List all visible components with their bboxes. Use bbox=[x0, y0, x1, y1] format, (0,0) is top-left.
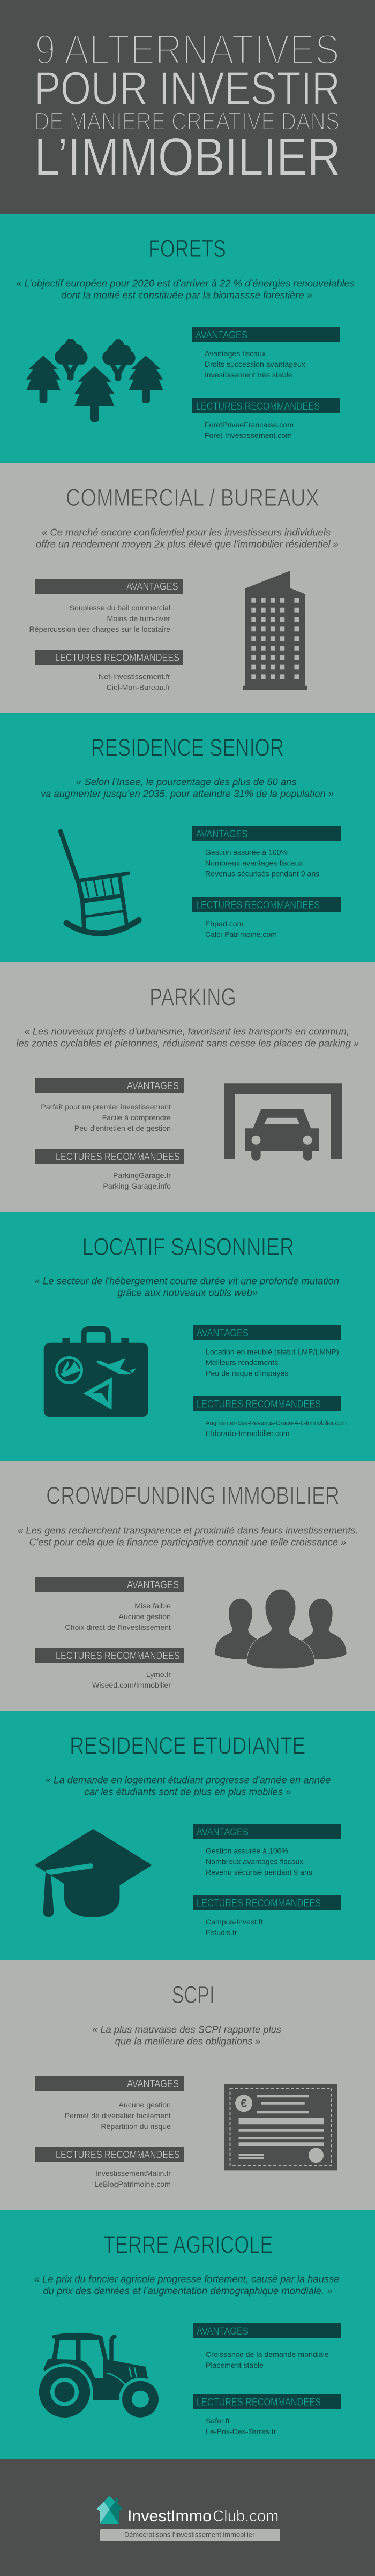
avantages bar bbox=[193, 1325, 341, 1340]
lectures list bbox=[94, 2169, 171, 2188]
avantages list: Croissance de la demande mondiale bbox=[206, 2350, 329, 2359]
avantages list: Peu de risque d'impayés bbox=[206, 1369, 288, 1377]
lectures list: Calci-Patrimoine.com bbox=[205, 930, 277, 939]
avantages bar bbox=[192, 327, 340, 342]
icon: rocking chair bbox=[61, 832, 139, 933]
panel: scpi bbox=[0, 1960, 375, 2210]
lectures list: Ehpad.com bbox=[205, 919, 243, 928]
title: 9 ALTERNATIVES bbox=[35, 26, 340, 73]
lectures list bbox=[206, 2416, 276, 2436]
lectures list: Estudis.fr bbox=[206, 1928, 237, 1937]
quote: forets: dont la moitié est constituée par la biomassse forestière » bbox=[61, 290, 312, 300]
panel: terre agricole bbox=[0, 2210, 375, 2459]
title bbox=[34, 26, 341, 186]
quote: scpi: que la meilleure des obligations » bbox=[115, 2036, 261, 2047]
quote: parking: les zones cyclables et pietonnes, réduisent sans cesse les places de parking » bbox=[16, 1038, 359, 1049]
avantages list: Nombreux avantages fiscaux bbox=[206, 1857, 303, 1865]
avantages list bbox=[206, 1846, 312, 1876]
quote: scpi: « La plus mauvaise des SCPI rapporte plus bbox=[92, 2024, 281, 2035]
lectures bar bbox=[35, 1149, 184, 1164]
title: L’IMMOBILIER bbox=[34, 127, 341, 186]
quote: scpi bbox=[92, 2024, 281, 2047]
avantages list: Gestion assurée à 100% bbox=[206, 1846, 288, 1855]
quote: residence etudiante bbox=[46, 1775, 331, 1797]
avantages list: Gestion assurée à 100% bbox=[205, 848, 288, 857]
lectures bar bbox=[35, 2147, 184, 2162]
panel: header bbox=[0, 0, 375, 214]
lectures list bbox=[206, 1917, 264, 1937]
heading: residence senior: RESIDENCE SENIOR bbox=[91, 734, 284, 761]
lectures bar bbox=[35, 650, 183, 665]
avantages list bbox=[206, 1347, 339, 1377]
lectures list bbox=[206, 1421, 347, 1438]
heading: scpi: SCPI bbox=[171, 1981, 214, 2008]
quote: residence etudiante: car les étudiants sont de plus en plus mobiles » bbox=[85, 1787, 291, 1797]
lectures list: Lymo.fr bbox=[146, 1670, 171, 1679]
lectures bar: LECTURES RECOMMANDEES bbox=[56, 1651, 180, 1662]
panel: footer bbox=[0, 2459, 375, 2576]
logo wordmark bbox=[128, 2507, 279, 2525]
logo wordmark: InvestImmo bbox=[128, 2507, 212, 2525]
avantages bar: AVANTAGES bbox=[196, 829, 248, 840]
avantages list: Avantages fiscaux bbox=[205, 349, 266, 358]
quote: crowdfunding: C'est pour cela que la finance participative connait une telle croissance » bbox=[29, 1537, 346, 1548]
avantages list bbox=[65, 1601, 171, 1631]
avantages list: Revenus sécurisés pendant 9 ans bbox=[205, 870, 319, 878]
avantages list bbox=[41, 1102, 171, 1132]
lectures list: Net-Investissement.fr bbox=[99, 672, 170, 681]
quote: residence senior bbox=[41, 777, 334, 799]
quote: locatif saisonnier bbox=[35, 1276, 339, 1298]
panel: residence etudiante bbox=[0, 1711, 375, 1960]
heading: locatif saisonnier: LOCATIF SAISONNIER bbox=[82, 1233, 294, 1260]
avantages list: Meilleurs rendements bbox=[206, 1358, 278, 1366]
avantages list: Investissement très stable bbox=[205, 371, 292, 379]
lectures list: Wiseed.com/Immobilier bbox=[92, 1681, 171, 1689]
avantages list: Parfait pour un premier investissement bbox=[41, 1102, 171, 1111]
quote: residence senior: « Selon l’Insee, le pourcentage des plus de 60 ans bbox=[76, 777, 297, 788]
avantages list: Moins de turn-over bbox=[107, 614, 170, 623]
panel: forets bbox=[0, 214, 375, 463]
lectures list bbox=[103, 1171, 171, 1190]
quote: parking: « Les nouveaux projets d'urbanisme, favorisant les transports en commun, bbox=[25, 1026, 349, 1037]
avantages list: Souplesse du bail commercial bbox=[70, 603, 170, 612]
avantages list: Location en meublé (statut LMP/LMNP) bbox=[206, 1347, 339, 1356]
quote: commercial bbox=[36, 527, 339, 550]
avantages list: Aucune gestion bbox=[118, 2101, 171, 2109]
icon: logo house bbox=[96, 2496, 123, 2524]
avantages list bbox=[29, 603, 170, 633]
quote: commercial: « Ce marché encore confidentiel pour les investisseurs individuels bbox=[42, 527, 331, 538]
avantages list: Revenu sécurisé pendant 9 ans bbox=[206, 1868, 312, 1876]
lectures bar: LECTURES RECOMMANDEES bbox=[56, 1152, 180, 1163]
lectures list: Eldorado-Immobilier.com bbox=[206, 1429, 290, 1438]
avantages bar bbox=[193, 1824, 341, 1839]
lectures list: Foret-Investissement.com bbox=[205, 431, 292, 440]
lectures list: LeBlogPatrimoine.com bbox=[94, 2180, 171, 2188]
quote: locatif saisonnier: grâce aux nouveaux outils web» bbox=[117, 1288, 258, 1298]
lectures list: InvestissementMalin.fr bbox=[95, 2169, 171, 2178]
quote: residence senior: va augmenter jusqu’en 2035, pour atteindre 31% de la population » bbox=[41, 789, 334, 799]
icon: graduation cap bbox=[36, 1830, 151, 1917]
avantages bar: AVANTAGES bbox=[126, 581, 178, 593]
avantages bar bbox=[35, 1078, 184, 1093]
tagline bbox=[100, 2529, 280, 2541]
avantages bar: AVANTAGES bbox=[197, 2326, 249, 2337]
quote: parking bbox=[16, 1026, 359, 1049]
quote: forets bbox=[16, 278, 355, 300]
lectures list bbox=[92, 1670, 171, 1689]
quote: locatif saisonnier: « Le secteur de l'hébergement courte durée vit une profonde mutation bbox=[35, 1276, 339, 1287]
lectures bar: LECTURES RECOMMANDEES bbox=[55, 653, 179, 664]
avantages list: Nombreux avantages fiscaux bbox=[205, 859, 303, 867]
quote: forets: « L’objectif européen pour 2020 est d’arriver à 22 % d’énergies renouvelables bbox=[16, 278, 355, 289]
avantages list: Placement stable bbox=[206, 2361, 264, 2369]
avantages list bbox=[205, 848, 319, 878]
lectures list: ParkingGarage.fr bbox=[113, 1171, 171, 1180]
avantages list: Droits succession avantageux bbox=[205, 360, 305, 368]
icon: three people bbox=[215, 1589, 347, 1669]
lectures list: Safer.fr bbox=[206, 2416, 230, 2425]
lectures list: Ciel-Mon-Bureau.fr bbox=[107, 683, 170, 691]
lectures list bbox=[205, 420, 294, 440]
avantages bar bbox=[35, 2076, 184, 2091]
lectures bar bbox=[35, 1648, 184, 1663]
quote: commercial: offre un rendement moyen 2x plus élevé que l'immobilier résidentiel » bbox=[36, 539, 339, 550]
lectures bar: LECTURES RECOMMANDEES bbox=[196, 401, 320, 412]
lectures list: ForetPriveeFrancaise.com bbox=[205, 420, 294, 429]
lectures list: Parking-Garage.info bbox=[103, 1182, 171, 1190]
icon: suitcase bbox=[44, 1326, 148, 1417]
avantages bar bbox=[192, 826, 341, 841]
avantages list bbox=[64, 2101, 171, 2131]
lectures list bbox=[205, 919, 277, 939]
avantages bar bbox=[35, 1577, 184, 1592]
lectures bar: LECTURES RECOMMANDEES bbox=[197, 1898, 321, 1909]
avantages bar: AVANTAGES bbox=[127, 1081, 179, 1092]
lectures bar: LECTURES RECOMMANDEES bbox=[197, 2397, 321, 2408]
avantages list: Répercussion des charges sur le locataire bbox=[29, 625, 170, 633]
icon: certificate bbox=[224, 2084, 338, 2170]
icon: car in garage bbox=[224, 1083, 342, 1161]
avantages bar bbox=[35, 579, 183, 594]
avantages list: Permet de diversifier facilement bbox=[64, 2111, 171, 2120]
avantages list: Aucune gestion bbox=[118, 1612, 171, 1621]
lectures bar: LECTURES RECOMMANDEES bbox=[196, 900, 320, 911]
avantages bar: AVANTAGES bbox=[197, 1328, 249, 1339]
quote: terre agricole bbox=[34, 2274, 340, 2297]
panel: parking bbox=[0, 962, 375, 1212]
heading: commercial: COMMERCIAL / BUREAUX bbox=[66, 484, 319, 511]
icon: trees bbox=[26, 339, 163, 422]
avantages bar: AVANTAGES bbox=[197, 1827, 249, 1838]
avantages bar bbox=[193, 2323, 341, 2338]
avantages list: Facile à comprendre bbox=[102, 1113, 171, 1122]
quote: crowdfunding: « Les gens recherchent transparence et proximité dans leurs investissements. bbox=[18, 1525, 358, 1536]
quote: terre agricole: « Le prix du foncier agricole progresse fortement, causé par la hausse bbox=[34, 2274, 340, 2285]
avantages bar: AVANTAGES bbox=[127, 2079, 179, 2090]
heading: parking: PARKING bbox=[149, 983, 236, 1010]
avantages list bbox=[205, 349, 305, 379]
panel: residence senior bbox=[0, 713, 375, 962]
avantages bar: AVANTAGES bbox=[196, 330, 248, 341]
lectures list: Augmenter-Ses-Revenus-Grace-A-L-Immobilier.com bbox=[206, 1421, 347, 1427]
tagline: Démocratisons l'investissement immobilier bbox=[124, 2530, 255, 2539]
avantages list: Peu d'entretien et de gestion bbox=[74, 1124, 171, 1132]
lectures list: Le-Prix-Des-Terres.fr bbox=[206, 2427, 276, 2436]
icon: certificate: € bbox=[241, 2097, 247, 2110]
panel: commercial bbox=[0, 463, 375, 713]
heading: forets: FORETS bbox=[148, 235, 226, 262]
icon: tractor bbox=[36, 2333, 162, 2421]
panel: locatif saisonnier bbox=[0, 1212, 375, 1461]
avantages list: Choix direct de l'investissement bbox=[65, 1623, 171, 1631]
quote: residence etudiante: « La demande en logement étudiant progresse d'année en année bbox=[46, 1775, 331, 1786]
quote: terre agricole: du prix des denrées et l’augmentation démographique mondiale. » bbox=[43, 2286, 332, 2297]
avantages list bbox=[206, 2350, 329, 2369]
lectures bar: LECTURES RECOMMANDEES bbox=[197, 1399, 321, 1410]
avantages bar: AVANTAGES bbox=[127, 1580, 179, 1591]
quote: crowdfunding bbox=[18, 1525, 358, 1548]
lectures list bbox=[99, 672, 170, 691]
panel: crowdfunding bbox=[0, 1461, 375, 1711]
avantages list: Répartition du risque bbox=[101, 2122, 171, 2131]
lectures list: Campus-Invest.fr bbox=[206, 1917, 264, 1926]
lectures bar: LECTURES RECOMMANDEES bbox=[56, 2150, 180, 2161]
heading: terre agricole: TERRE AGRICOLE bbox=[103, 2231, 273, 2258]
avantages list: Mise faible bbox=[134, 1601, 171, 1610]
logo wordmark: Club.com bbox=[213, 2507, 279, 2525]
heading: residence etudiante: RESIDENCE ETUDIANTE bbox=[70, 1732, 305, 1759]
icon: office building bbox=[243, 571, 308, 690]
